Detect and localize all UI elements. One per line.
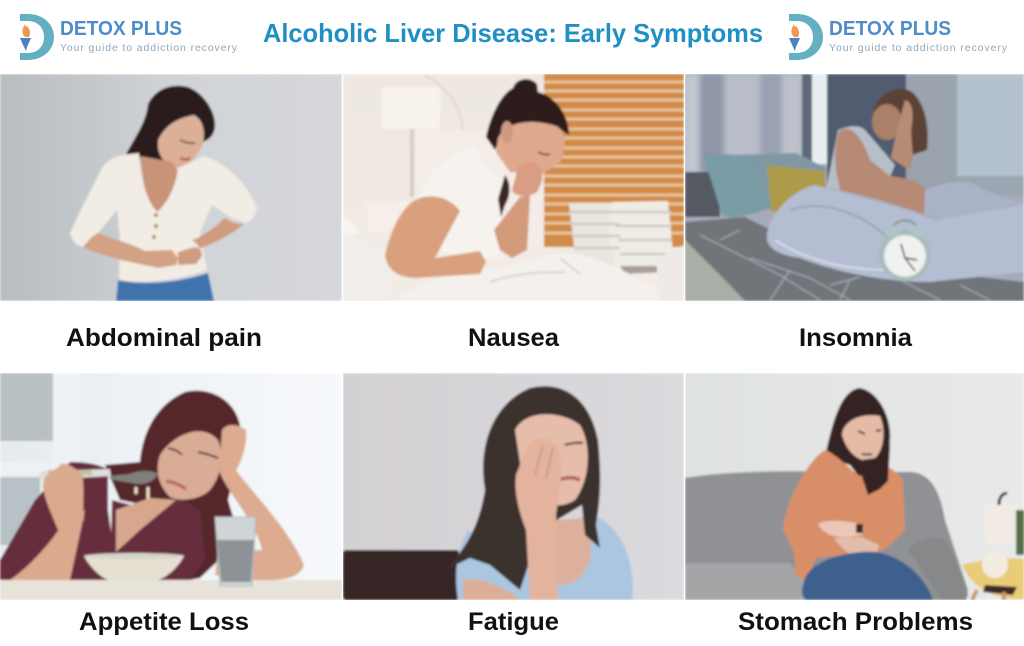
- label: Insomnia: Insomnia: [799, 324, 913, 352]
- panel: appetite loss photo: [0, 373, 342, 600]
- title: Alcoholic Liver Disease: Early Symptoms: [263, 20, 763, 48]
- logo: Detox Plus right: DETOX PLUS: [829, 18, 951, 40]
- logo: Detox Plus left: Your guide to addiction recovery: [60, 42, 238, 54]
- label: Stomach Problems: Stomach Problems: [738, 608, 973, 636]
- panel: nausea photo: [343, 74, 684, 301]
- logo: Detox Plus left: DETOX PLUS: [60, 18, 182, 40]
- panel: fatigue photo: [343, 373, 684, 600]
- label: Fatigue: Fatigue: [468, 608, 559, 636]
- logo: Detox Plus left: [20, 14, 238, 60]
- panel: insomnia photo: [685, 74, 1024, 301]
- logo: Detox Plus right: Your guide to addiction recovery: [829, 42, 1008, 54]
- logo: Detox Plus right: [789, 14, 1008, 60]
- label: Appetite Loss: Appetite Loss: [79, 608, 249, 636]
- label: Nausea: Nausea: [468, 324, 560, 352]
- panel: stomach problems photo: [685, 373, 1024, 600]
- panel: abdominal pain photo: [0, 74, 342, 301]
- label: Abdominal pain: Abdominal pain: [66, 324, 262, 352]
